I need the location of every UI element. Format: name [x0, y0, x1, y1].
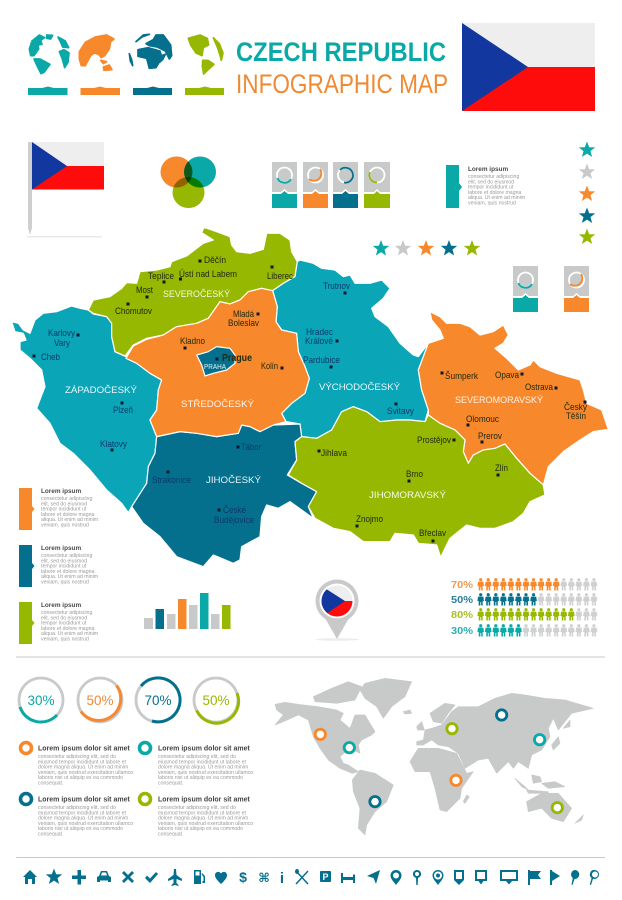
icon: target pin — [432, 870, 444, 885]
city and region labels: Boleslav — [228, 318, 259, 328]
city and region labels: Jihlava — [321, 448, 347, 458]
icon: fork and spoon — [295, 869, 308, 884]
city and region labels: Děčín — [204, 255, 226, 265]
icon: parking — [320, 871, 331, 882]
city and region labels: Trutnov — [323, 281, 350, 291]
city and region labels: Těšín — [566, 411, 586, 421]
icon: dark teal globe — [129, 34, 172, 68]
text block: dark teal bullet: Lorem ipsum dolor sit amet — [38, 796, 130, 804]
icon: orange globe — [79, 35, 114, 70]
city markers — [32, 260, 586, 542]
side legend: orange — [19, 488, 98, 530]
legend text: veniam, quis nostrud — [468, 200, 516, 206]
text block: dark teal bullet: consectetur adipiscing elit, sed do — [38, 805, 116, 811]
people pictogram chart — [451, 578, 598, 637]
regional map of Czech Republic — [12, 227, 608, 567]
text block: orange bullet: laboris nisi ut aliquip ex ea commodo — [38, 775, 123, 781]
text block: dark teal bullet: eiusmod tempor incididunt ut labore et — [38, 810, 127, 816]
row 30% — [451, 624, 598, 637]
city and region labels: Opava — [495, 370, 519, 380]
text block: teal bullet — [140, 742, 253, 786]
city and region labels: SEVEROČESKÝ — [163, 289, 230, 299]
side legend: dark teal: veniam, quis nostrud — [41, 580, 89, 586]
row 70%: 70% — [451, 579, 474, 591]
donut: 70% — [136, 678, 180, 722]
city and region labels: JIHOMORAVSKÝ — [369, 490, 446, 500]
region: Severomoravsky — [418, 312, 608, 485]
side legend: dark teal: Lorem ipsum — [41, 545, 81, 552]
icon: square flag — [528, 870, 541, 885]
title — [236, 37, 448, 99]
icon: bed — [341, 873, 355, 883]
globe label bar: orange — [80, 86, 120, 95]
donut: 50% orange: 50% — [86, 693, 114, 708]
city and region labels: SEVEROMORAVSKÝ — [455, 395, 543, 405]
waving flag on pole — [27, 142, 104, 238]
icon: pennant flag — [550, 870, 560, 885]
region: Praha — [197, 347, 235, 376]
text block: green bullet: eiusmod tempor incididunt ut labore et — [158, 810, 247, 816]
city and region labels: ZÁPADOČESKÝ — [65, 385, 137, 395]
region: Stredocesky — [126, 288, 309, 437]
text block: dark teal bullet: veniam, quis nostrud exercitation ullamco — [38, 821, 133, 827]
world map with markers — [275, 678, 593, 835]
side legend: orange: consectetur adipiscing — [41, 496, 92, 502]
donut: 30%: 30% — [27, 693, 55, 708]
row 80% — [451, 608, 598, 621]
city and region labels: Budějovice — [214, 515, 254, 525]
text block: dark teal bullet: dolore magna aliqua. Ut enim ad minim — [38, 816, 128, 822]
icon: search — [590, 870, 599, 885]
regions — [12, 227, 608, 567]
city and region labels: Plzeň — [113, 405, 133, 415]
region: Vychodocesky — [273, 260, 428, 438]
side legend: green: veniam, quis nostrud — [41, 636, 89, 642]
side legend: green: elit, sed do eiusmod — [41, 615, 87, 621]
icon: plus — [72, 870, 86, 884]
city and region labels: České — [223, 505, 246, 515]
bar chart — [144, 593, 230, 629]
region: Jihomoravsky — [288, 407, 545, 557]
legend text: elit, sed do eiusmod — [468, 179, 514, 185]
text block: teal bullet: eiusmod tempor incididunt ut labore et — [158, 759, 247, 765]
card orange — [303, 162, 328, 208]
city and region labels: Liberec — [267, 271, 293, 281]
city and region labels: VÝCHODOČESKÝ — [319, 382, 400, 392]
city and region labels: JIHOČESKÝ — [206, 475, 261, 485]
icon: pushpin — [571, 870, 579, 885]
city and region labels: Kolín — [261, 361, 278, 371]
side legend: orange: labore et dolore magna — [41, 512, 94, 518]
city and region labels: Prerov — [478, 431, 502, 441]
text block: orange bullet — [20, 742, 133, 786]
text block: green bullet — [140, 794, 253, 838]
icon: map pin with flag — [315, 580, 359, 641]
city and region labels: Cheb — [41, 352, 60, 362]
icon: plane — [168, 869, 182, 886]
city and region labels: Hradec — [306, 327, 333, 337]
city and region labels: Klatovy — [100, 439, 127, 449]
text block: green bullet: laboris nisi ut aliquip ex ea commodo — [158, 826, 243, 832]
text block: green bullet: consectetur adipiscing elit, sed do — [158, 805, 236, 811]
card orange right — [564, 266, 589, 312]
icon: cross — [122, 871, 134, 883]
text block: dark teal bullet: laboris nisi ut aliquip ex ea commodo — [38, 826, 123, 832]
title line 1: CZECH REPUBLIC — [236, 37, 446, 67]
text block: teal bullet: laboris nisi ut aliquip ex ea commodo — [158, 775, 243, 781]
legend text: tempor incididunt ut — [468, 185, 514, 191]
text block: orange bullet: veniam, quis nostrud exercitation ullamco — [38, 770, 133, 776]
city and region labels: Český — [564, 402, 587, 412]
city and region labels: Ostrava — [525, 382, 553, 392]
side legend: dark teal: labore et dolore magna — [41, 569, 94, 575]
globe label bar: dark teal — [133, 86, 172, 95]
legend text: aliqua. Ut enim ad minim — [468, 195, 525, 201]
legend text: labore et dolore magna — [468, 190, 521, 196]
side legend: orange: aliqua. Ut enim ad minim — [41, 517, 98, 523]
text block: orange bullet: dolore magna aliqua. Ut enim ad minim — [38, 765, 128, 771]
markers — [315, 710, 562, 813]
row 80%: 80% — [451, 609, 474, 621]
donut: 30% — [19, 678, 63, 722]
side legend: dark teal: tempor incididunt ut — [41, 564, 87, 570]
legend text: consectetur adipiscing — [468, 174, 519, 180]
side legend: green: aliqua. Ut enim ad minim — [41, 631, 98, 637]
text block: orange bullet: consectetur adipiscing elit, sed do — [38, 754, 116, 760]
city and region labels: Mladá — [233, 309, 254, 319]
city and region labels: Teplice — [148, 271, 174, 281]
legend text — [468, 166, 525, 206]
card dark teal — [333, 162, 358, 208]
icon: speech marker — [475, 870, 487, 884]
city and region labels: Strakonice — [152, 475, 191, 485]
legend text block top — [446, 165, 525, 208]
icon: green globe — [188, 35, 223, 74]
side legend: dark teal: aliqua. Ut enim ad minim — [41, 574, 98, 580]
city and region labels: Olomouc — [466, 414, 499, 424]
side legend: dark teal: elit, sed do eiusmod — [41, 558, 87, 564]
city and region labels: STŘEDOČESKÝ — [181, 399, 254, 409]
icon: dollar: $ — [239, 869, 247, 885]
side legend: dark teal — [19, 545, 98, 587]
icon: pin outline — [390, 870, 402, 885]
icon: info: i — [280, 870, 284, 887]
icon: teal globe — [29, 35, 69, 74]
side legend: green: tempor incididunt ut — [41, 621, 87, 627]
city and region labels: Karlovy — [48, 328, 75, 338]
text block: green bullet: consequat. — [158, 832, 183, 838]
row 70% — [451, 578, 598, 591]
city and region labels: Most — [136, 285, 153, 295]
city and region labels: Prague — [222, 353, 252, 364]
icon: wide speech marker — [500, 870, 518, 884]
city and region labels — [41, 255, 587, 538]
text block: green bullet: veniam, quis nostrud exercitation ullamco — [158, 821, 253, 827]
side legend: green — [19, 602, 98, 644]
city and region labels: Králové — [305, 336, 333, 346]
legend text: Lorem ipsum — [468, 166, 508, 173]
icon: star — [46, 868, 62, 884]
small progress cards row — [272, 162, 390, 208]
icon: home — [23, 870, 37, 884]
icon: shield marker — [454, 870, 464, 885]
city and region labels: Znojmo — [356, 514, 383, 524]
city and region labels: Svitavy — [387, 406, 414, 416]
header: globes row — [28, 34, 224, 95]
side legend: green: consectetur adipiscing — [41, 610, 92, 616]
text block: orange bullet: Lorem ipsum dolor sit amet — [38, 746, 130, 752]
donut: 50% green: 50% — [202, 693, 230, 708]
text block: teal bullet: veniam, quis nostrud exercitation ullamco — [158, 770, 253, 776]
text block: dark teal bullet: consequat. — [38, 832, 63, 838]
city and region labels: Pardubice — [303, 355, 340, 365]
region: Severocesky — [88, 227, 297, 356]
city and region labels: Kladno — [180, 336, 205, 346]
icon: heart — [215, 872, 227, 884]
horizontal stars — [373, 240, 480, 256]
side legend: orange: Lorem ipsum — [41, 488, 81, 495]
donut: 70%: 70% — [144, 693, 172, 708]
donut: 50% green — [194, 678, 239, 723]
globe label bar: green — [185, 86, 224, 95]
icon: fuel pump — [194, 870, 205, 884]
city and region labels: PRAHA — [204, 364, 226, 371]
text block: teal bullet: Lorem ipsum dolor sit amet — [158, 746, 250, 752]
donut: 50% orange — [78, 678, 122, 722]
globe label bar: teal — [28, 86, 68, 95]
city and region labels: Brno — [406, 469, 423, 479]
icon: command: ⌘ — [258, 870, 270, 885]
side legend: orange: veniam, quis nostrud — [41, 522, 89, 528]
legend tab teal — [446, 165, 462, 208]
venn diagram — [160, 156, 216, 208]
side legend: green: Lorem ipsum — [41, 602, 81, 609]
row 50% — [451, 593, 598, 606]
side legend: dark teal: consectetur adipiscing — [41, 553, 92, 559]
text block: orange bullet: consequat. — [38, 780, 63, 786]
card teal right — [513, 266, 538, 312]
card green — [364, 162, 390, 208]
card pair right — [513, 266, 589, 312]
icon: small pin — [413, 870, 421, 885]
side legend: orange: tempor incididunt ut — [41, 507, 87, 513]
text block: green bullet: dolore magna aliqua. Ut enim ad minim — [158, 816, 248, 822]
region: Zapadocesky — [12, 306, 162, 513]
icon: car — [97, 871, 111, 882]
continents — [275, 678, 593, 835]
side legend: orange: elit, sed do eiusmod — [41, 501, 87, 507]
title line 2: INFOGRAPHIC MAP — [236, 69, 448, 99]
large flag of Czech Republic — [462, 23, 595, 111]
icon: parking: P — [322, 872, 329, 882]
text block: green bullet: Lorem ipsum dolor sit amet — [158, 796, 250, 804]
side legend: green: labore et dolore magna — [41, 626, 94, 632]
icon: navigation arrow — [367, 870, 380, 884]
city and region labels: Zlín — [495, 463, 508, 473]
text block: orange bullet: eiusmod tempor incididunt ut labore et — [38, 759, 127, 765]
text block: teal bullet: consectetur adipiscing elit, sed do — [158, 754, 236, 760]
region: Jihocesky — [132, 424, 317, 567]
city and region labels: Břeclav — [419, 528, 446, 538]
icon: check — [145, 872, 158, 883]
text block: dark teal bullet — [20, 794, 133, 838]
city and region labels: Šumperk — [445, 371, 478, 381]
city and region labels: Prostějov — [417, 435, 451, 445]
city and region labels: Ústí nad Labem — [179, 269, 237, 279]
city and region labels: Tábor — [241, 442, 261, 452]
city and region labels: Chomutov — [115, 306, 152, 316]
text block: teal bullet: consequat. — [158, 780, 183, 786]
card teal — [272, 162, 297, 208]
vertical stars — [579, 142, 595, 244]
text block: teal bullet: dolore magna aliqua. Ut enim ad minim — [158, 765, 248, 771]
row 30%: 30% — [451, 625, 474, 637]
city and region labels: Vary — [54, 338, 70, 348]
icon row — [23, 868, 599, 887]
row 50%: 50% — [451, 594, 474, 606]
